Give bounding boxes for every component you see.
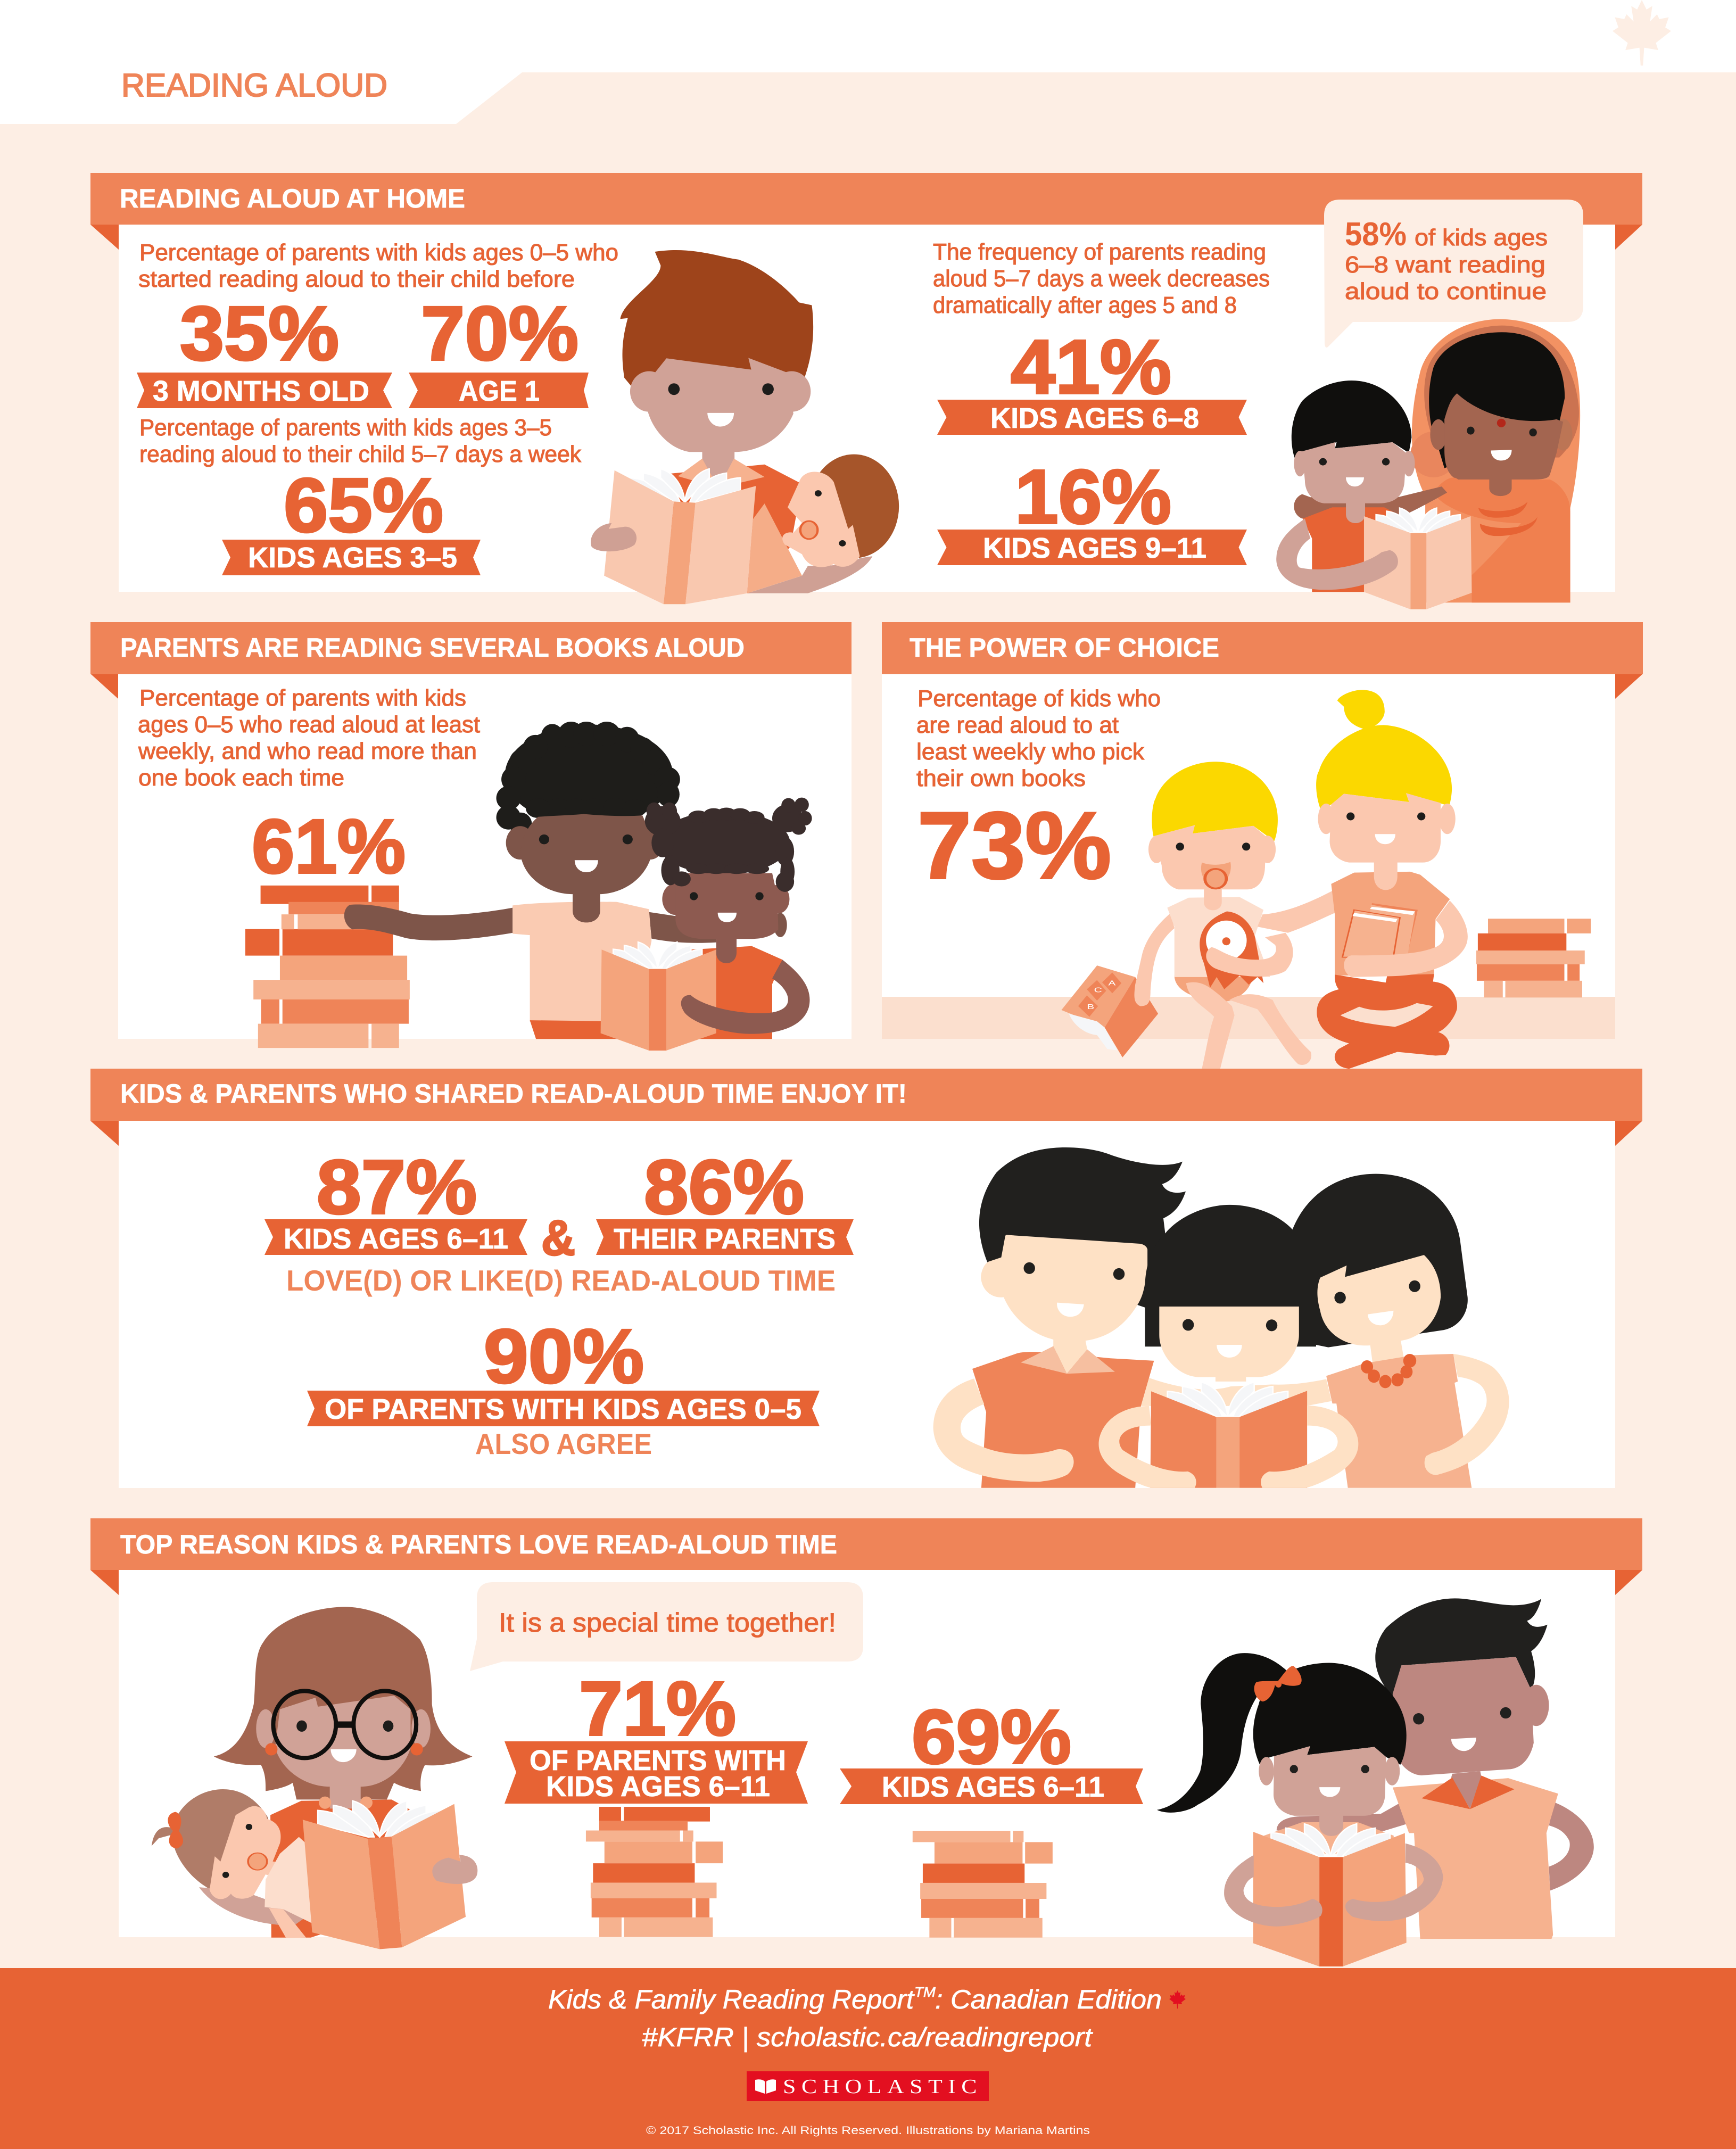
- illustration: father and girl reading: [1157, 1598, 1594, 1966]
- text block: frequency: The frequency of parents reading: [933, 239, 1266, 265]
- report title: : Canadian Edition: [935, 1985, 1162, 2014]
- icon: small book with letters: [1061, 965, 1158, 1057]
- stat: 65%: 65%: [284, 462, 443, 548]
- illustration: baby and child with books: [1061, 690, 1468, 1069]
- stat: 70%: 70%: [421, 291, 578, 376]
- stat: 86%: 86%: [644, 1144, 804, 1230]
- copyright: © 2017 Scholastic Inc. All Rights Reserved. Illustrations by Mariana Martins: [646, 2125, 1090, 2137]
- illustration: book stack: [586, 1807, 723, 1937]
- text block: one book each time: [138, 765, 344, 791]
- panel: the power of choice: [882, 622, 1643, 1069]
- ribbon: age 1: AGE 1: [459, 375, 540, 407]
- stat: 73%: 73%: [917, 792, 1111, 898]
- illustration: mother with baby and book: [152, 1607, 477, 1949]
- ribbon: kids ages 6-11: KIDS AGES 6–11: [284, 1223, 508, 1255]
- ribbon: parents with kids 6-11: OF PARENTS WITH: [530, 1745, 786, 1776]
- stat: 16%: 16%: [1015, 454, 1171, 540]
- text block: Percentage of parents with kids: [139, 685, 466, 711]
- ribbon: kids ages 3-5: KIDS AGES 3–5: [248, 542, 457, 574]
- ribbon: kids ages 6-8: KIDS AGES 6–8: [990, 402, 1199, 434]
- ribbon: kids ages 9-11: KIDS AGES 9–11: [983, 532, 1206, 564]
- text block: started reading: [138, 239, 618, 292]
- text block: [916, 685, 1161, 791]
- icon: red maple leaf: [1169, 1990, 1186, 2009]
- illustration: family of three reading: [933, 1147, 1509, 1488]
- text block: ages 3-5: Percentage of parents with kids ages 3–5: [139, 415, 552, 441]
- ribbon: 3 months old: 3 MONTHS OLD: [153, 375, 369, 407]
- stat: 71%: 71%: [579, 1666, 736, 1751]
- callout: special time: It is a special time together!: [499, 1608, 836, 1638]
- illustration: book stack: [1476, 919, 1591, 997]
- stat: 87%: 87%: [317, 1144, 477, 1230]
- text block: ages 3-5: [139, 415, 582, 467]
- heading: KIDS & PARENTS WHO SHARED READ-ALOUD TIME ENJOY IT!: [120, 1079, 907, 1109]
- heading: READING ALOUD AT HOME: [120, 184, 465, 213]
- ampersand: &: [541, 1210, 575, 1266]
- text block: are read aloud to at: [916, 712, 1119, 738]
- ribbon: parents with kids 6-11: [505, 1741, 808, 1804]
- callout: 58% of kids: 58%: [1345, 216, 1407, 253]
- panel: kids and parents enjoy it: [90, 1069, 1642, 1488]
- callout: special time: [470, 1582, 863, 1671]
- text block: Percentage of kids who: [917, 685, 1161, 712]
- heading: THE POWER OF CHOICE: [910, 633, 1219, 663]
- illustration: mother and child: [1276, 319, 1580, 609]
- text block: started reading: started reading aloud to their child before: [138, 266, 575, 292]
- callout: 58% of kids: of kids ages: [1415, 225, 1548, 251]
- footer: [0, 1968, 1736, 2149]
- text block: ages 0–5 who read aloud at least: [138, 712, 480, 738]
- ribbon: their parents: THEIR PARENTS: [614, 1223, 836, 1255]
- icon: maple leaf watermark: [1613, 0, 1671, 65]
- heading: PARENTS ARE READING SEVERAL BOOKS ALOUD: [120, 633, 745, 663]
- illustration: book stack: [245, 886, 410, 1048]
- panel: top reason: [90, 1518, 1642, 1966]
- illustration: book stack: [913, 1831, 1053, 1938]
- stat: 41%: 41%: [1011, 324, 1171, 410]
- report title: Kids & Family Reading Report: [548, 1985, 915, 2014]
- ribbon: age 1: [409, 373, 589, 408]
- ribbon: kids ages 9-11: [937, 530, 1247, 565]
- panel: parents are reading several books: [90, 622, 852, 1051]
- text block: love or like: LOVE(D) OR LIKE(D) READ-ALOUD TIME: [286, 1264, 836, 1297]
- logo: Scholastic: SCHOLASTIC: [783, 2076, 982, 2098]
- text block: weekly, and who read more than: [138, 738, 477, 764]
- ribbon: parents with kids 0-5: OF PARENTS WITH KIDS AGES 0–5: [325, 1393, 801, 1425]
- illustration: parent and girl reading: [344, 722, 812, 1051]
- ribbon: kids ages 6-11: [840, 1768, 1143, 1804]
- logo: Scholastic: [747, 2071, 989, 2101]
- hashtag and url: #KFRR | scholastic.ca/readingreport: [642, 2022, 1093, 2053]
- callout: 58% of kids: [1324, 200, 1583, 348]
- callout: 58% of kids: aloud to continue: [1345, 278, 1547, 304]
- illustration: boy reading with baby: [591, 250, 899, 604]
- text block: least weekly who pick: [916, 739, 1145, 765]
- icon: small book with letters: C: [1094, 986, 1102, 994]
- stat: 69%: 69%: [912, 1694, 1071, 1780]
- text block: started reading: Percentage of parents with kids ages 0–5 who: [139, 239, 618, 266]
- report title: TM: [914, 1984, 936, 2000]
- text block: frequency: dramatically after ages 5 and 8: [933, 292, 1237, 318]
- callout: 58% of kids: 6–8 want reading: [1345, 252, 1545, 278]
- stat: 90%: 90%: [484, 1313, 644, 1399]
- text block: frequency: aloud 5–7 days a week decreases: [933, 266, 1270, 292]
- heading: TOP REASON KIDS & PARENTS LOVE READ-ALOUD TIME: [120, 1530, 837, 1559]
- ribbon: parents with kids 6-11: KIDS AGES 6–11: [546, 1771, 770, 1803]
- stat: 61%: 61%: [252, 804, 406, 889]
- ribbon: kids ages 6-11: KIDS AGES 6–11: [882, 1771, 1104, 1803]
- text block: [138, 685, 480, 791]
- icon: small book with letters: A: [1108, 979, 1116, 987]
- text block: ages 3-5: reading aloud to their child 5–7 days a week: [139, 441, 582, 467]
- panel: reading aloud at home: [90, 173, 1642, 609]
- ribbon: kids ages 6-8: [937, 400, 1247, 435]
- title: READING ALOUD: [121, 67, 387, 103]
- report title: [548, 1984, 1162, 2014]
- stat: 35%: 35%: [180, 291, 339, 376]
- text block: frequency: [933, 239, 1270, 318]
- text block: also agree: ALSO AGREE: [475, 1427, 652, 1460]
- text block: their own books: [916, 765, 1086, 791]
- icon: small book with letters: B: [1087, 1003, 1094, 1011]
